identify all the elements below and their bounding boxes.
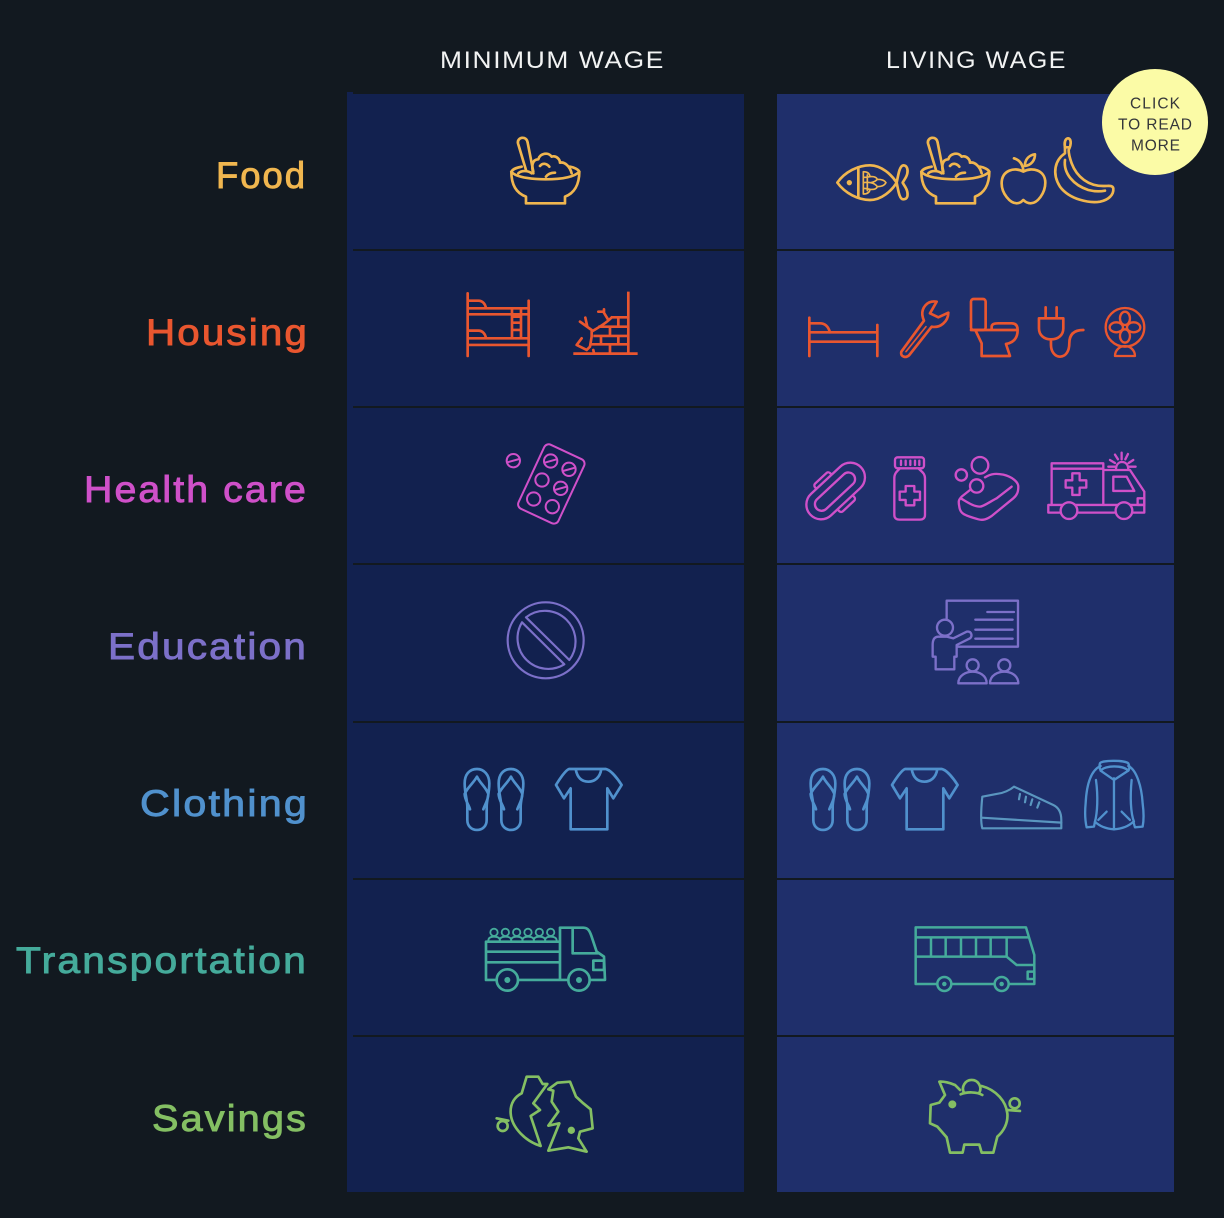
icon: crumbling brick wall (573, 292, 638, 354)
icon: no entry sign (508, 602, 584, 678)
callout: click to read more: TO READ (1118, 116, 1193, 134)
icon: bus (916, 927, 1034, 991)
icon: banana (1055, 138, 1113, 202)
icon: crowded open truck (486, 928, 605, 991)
icon: piggy bank (930, 1080, 1020, 1153)
icon: electric plug (1039, 307, 1083, 357)
icon: bunk bed (468, 293, 529, 356)
icon: flip flops (465, 769, 523, 830)
label: transportation: Transportation (16, 939, 308, 981)
icon: bowl of porridge (921, 138, 989, 203)
panel: minimum wage column (347, 92, 744, 1192)
icon: teacher at a blackboard with students (933, 601, 1018, 683)
icon: blister pack of pills (507, 443, 586, 525)
icon: soap and bubbles (956, 457, 1018, 520)
icon: wrench (901, 301, 948, 357)
icon: ambulance (1048, 453, 1144, 519)
icon: sneaker (981, 787, 1061, 828)
label: food: Food (216, 154, 307, 196)
label: health care: Health care (84, 468, 308, 510)
callout: click to read more: CLICK (1130, 96, 1181, 112)
icon: fish (837, 165, 908, 200)
icon: medicine bottle (894, 457, 925, 520)
heading: living wage: LIVING WAGE (886, 47, 1067, 74)
label: savings: Savings (152, 1097, 308, 1139)
icon: bowl of porridge (511, 138, 579, 203)
callout: click to read more (1102, 69, 1208, 175)
icon: flip flops (811, 769, 869, 830)
column headings (440, 47, 1067, 74)
icon: t-shirt (556, 769, 622, 829)
icon: bed (809, 318, 877, 356)
icon: electric fan (1106, 308, 1144, 356)
heading: minimum wage: MINIMUM WAGE (440, 47, 665, 74)
icon: broken piggy bank (497, 1077, 593, 1152)
label: clothing: Clothing (140, 782, 309, 824)
icon: t-shirt (892, 769, 958, 829)
icon: toilet (971, 299, 1018, 356)
icon: hooded jacket (1085, 761, 1144, 829)
label: housing: Housing (146, 311, 309, 353)
row labels (16, 154, 309, 1139)
icon: sanitary pad (800, 457, 871, 525)
icon: apple (1002, 154, 1045, 203)
label: education: Education (108, 625, 308, 667)
callout: click to read more: MORE (1131, 138, 1181, 154)
panel: living wage column (777, 94, 1174, 1192)
